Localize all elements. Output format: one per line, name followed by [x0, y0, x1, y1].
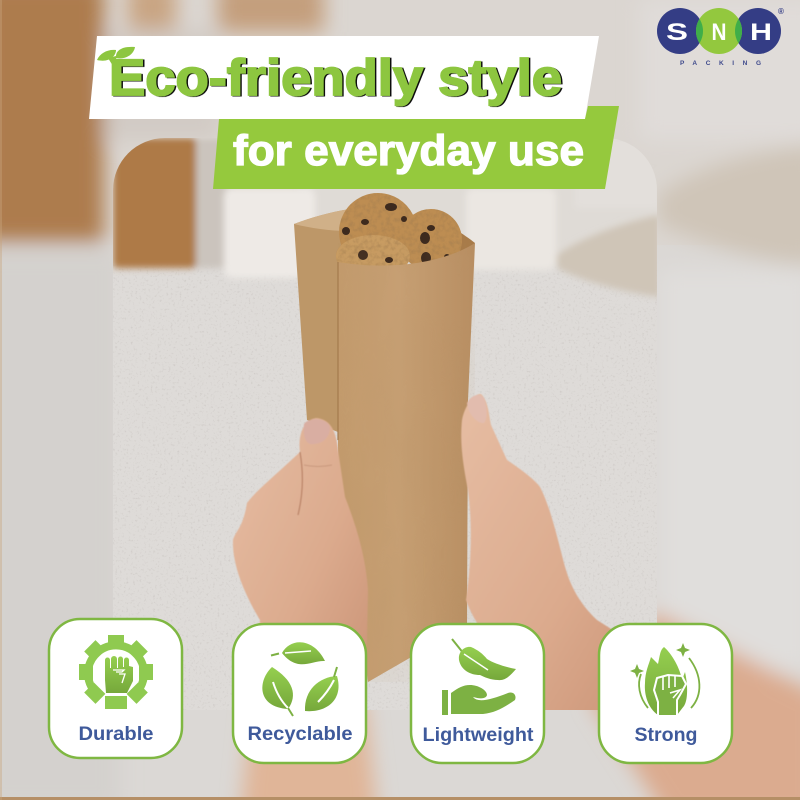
card: Strong [599, 624, 732, 763]
subheading band: for everyday use [213, 106, 619, 189]
logo: SNH Packing: PACKING [680, 60, 761, 67]
icon: leaf sprout on heading [97, 47, 135, 66]
left hand [232, 418, 368, 644]
logo: SNH Packing: S [666, 19, 688, 46]
label: Lightweight: Lightweight [422, 725, 534, 746]
back of the bag [294, 209, 475, 432]
kraft paper bag [338, 243, 475, 682]
icon: fist in flame [630, 643, 699, 715]
logo: SNH Packing [657, 7, 784, 67]
label: Durable: Durable [78, 724, 154, 745]
card: Recyclable [233, 624, 366, 763]
logo: SNH Packing: N [712, 19, 726, 46]
card: Durable [49, 619, 182, 758]
heading band: Eco-friendly style [89, 36, 599, 119]
subheading text: for everyday use [233, 127, 584, 175]
icon: gear with fist [79, 635, 153, 709]
card: Lightweight [411, 624, 544, 763]
logo: SNH Packing: ® [778, 7, 784, 16]
heading text: Eco-friendly style [109, 49, 562, 106]
photo panel: hands holding kraft bag [113, 138, 660, 720]
cookies [336, 193, 462, 266]
icon: three recycling leaves [262, 642, 339, 716]
logo: SNH Packing: H [750, 19, 772, 46]
label: Recyclable: Recyclable [248, 724, 352, 745]
icon: feather over hand [442, 639, 516, 715]
right hand and forearm [460, 394, 612, 710]
label: Strong: Strong [634, 725, 698, 746]
